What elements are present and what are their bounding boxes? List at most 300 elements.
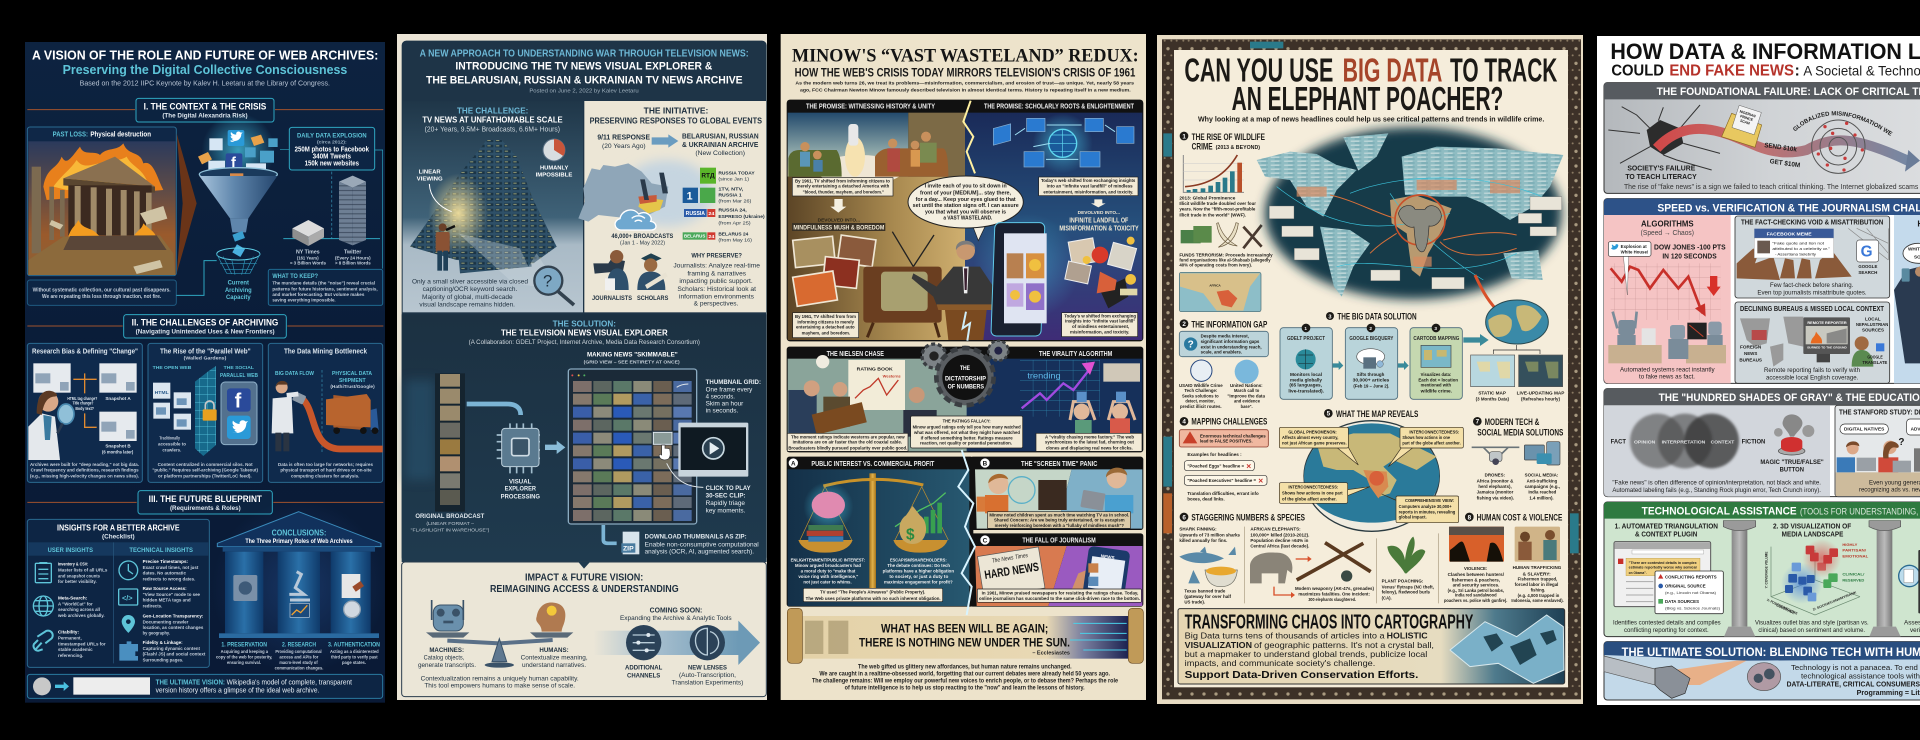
panel: declining bureaus: REMOTE REPORTER (1807, 320, 1847, 325)
caption: virality: A "virality chasing meme factory." The web (1045, 434, 1134, 439)
panel: insights checklist: searching across all (58, 607, 100, 612)
panel: technological assistance: & CONTEXT PLUGIN (1635, 532, 1697, 539)
panel: the initiative: impacting public support. (679, 278, 753, 285)
panel: research bias: Archives were built for "deep reading," not big data. (30, 462, 140, 468)
callout: conflicting reports popup: (Blog vs. Science Journals) (1665, 605, 1721, 610)
caption: web shift: into an "infinite vast landfill" of mindless (1047, 184, 1133, 189)
panel: the initiative: framing & narratives (687, 270, 746, 277)
panel: human cost and violence: HUMAN COST & VIOLENCE (1477, 513, 1562, 523)
icon: lightning divider (963, 101, 975, 173)
panel: Stanford study: ? (1898, 437, 1904, 448)
panel: mapping challenges: ✕ (1258, 478, 1264, 485)
arrow: chip to grid (545, 441, 565, 454)
panel: public interest vs commercial profit: TV used "The People's Airwaves" (Public Property). (820, 590, 925, 595)
callout: ratings fallacy: reaction, not quality or potential penetration. (920, 441, 1012, 446)
banner: transforming chaos into cartography: but a mapmaker to understand global trends, publicize local (1185, 649, 1427, 659)
banner: transforming chaos into cartography: TRANSFORMING CHAOS INTO CARTOGRAPHY (1185, 610, 1473, 633)
caption: web shift: entertainment, misinformation, and toxicity. (1043, 189, 1133, 194)
panel: modern tech and social media: Jamaica (monitor (1477, 489, 1514, 494)
callout: Minow speech: you that what you will observe is (925, 209, 1006, 215)
panel: research bias: Crawl frequency and definitions, research findings (31, 468, 139, 474)
panel: what the map reveals: part of the globe affect another. (1402, 441, 1461, 446)
panel: algorithms: Automated systems react instantly (1620, 367, 1715, 374)
panel: declining bureaus: NEWS (1744, 351, 1757, 356)
panel: the initiative: (since Jan 1) (718, 177, 749, 183)
arrow: loss to archiving basket (176, 261, 217, 295)
panel: past loss burning temple: Physical destruction (90, 132, 151, 139)
panel: research bias: Title change? (73, 401, 94, 406)
panel: the solution: VISUAL (509, 479, 532, 485)
chart: market crash (1611, 263, 1721, 320)
caption: web shift: Today's web shifted from exchanging insights (1041, 178, 1136, 183)
caption: Nielsen chase: Broadcasters blindly pursued popularity over public good. (788, 445, 907, 450)
panel: staggering numbers: PLANT POACHING: (1382, 578, 1424, 584)
panel: parallel web: crawlers. (162, 447, 181, 452)
panel: the solution: (GRID VIEW – SEE ENTIRETY AT ONCE) (584, 360, 680, 366)
panel: technological assistance (1604, 502, 1920, 637)
panel: insights checklist: Documenting crawler (143, 619, 189, 624)
panel: public interest vs commercial profit: A (791, 460, 796, 467)
panel: screen time panic: Minow noted children spent as much time watching TV as in school. (989, 512, 1129, 517)
panel: information gap: 2 (1182, 321, 1186, 328)
panel: Minow vast wasteland infographic (781, 34, 1146, 700)
chart: rise of wildlife crime (1180, 132, 1265, 192)
callout: ultimate vision: THE ULTIMATE VISION: (156, 679, 225, 686)
panel: impact and future vision: IMPACT & FUTURE VISION: (525, 573, 643, 584)
panel: research bias: Body text? (75, 406, 94, 411)
panel: staggering numbers: Population decline ≈64% in (1250, 538, 1309, 543)
caption: past loss (27, 280, 176, 305)
labels: NY Times and Twitter words: (161 Years) (297, 255, 319, 260)
text block: funds terrorism: Proceeds increasingly (1225, 252, 1273, 257)
panel: impact and future vision: This tool empowers humans to make sense of scale. (424, 683, 575, 690)
caption: Nielsen chase: The moment ratings indicate westerns are popular, new (791, 434, 905, 439)
icon: bucket challenge people (1070, 363, 1140, 437)
panel: technological assistance: Identifies contested details and compiles (1613, 619, 1721, 626)
panel: the challenge: Only a small sliver accessible via closed (412, 279, 528, 286)
panel: staggering numbers: (CA). (1382, 595, 1392, 600)
panel: data and information literacy infographic (1597, 36, 1920, 705)
panel: the solution: in seconds. (706, 409, 739, 415)
text block: what to keep: The mundane details (the "noise") reveal crucial (272, 280, 375, 285)
chart: 3D media landscape: PARTISAN/ (1842, 548, 1867, 553)
banner: transforming chaos into cartography: Big Data turns tens of thousands of articles into a (1185, 631, 1385, 641)
panel: public interest vs commercial profit: platforms have a higher obligation (883, 569, 954, 574)
heading: mindfulness mush: DEVOLVED INTO... (818, 217, 861, 223)
panel: hundred shades of gray: BUTTON (1780, 467, 1804, 474)
panel: the challenge: VIEWING (417, 177, 443, 183)
panel: big data solution (1280, 311, 1462, 399)
panel: modern tech and social media: 1.4 million). (1529, 495, 1554, 500)
panel: research bias (27, 343, 142, 482)
callout: ratings fallacy: what was offered, not what they might have watched (913, 430, 1020, 435)
panel: research bias: Snapshot A (105, 396, 131, 401)
icon: newsroom men and ratings book (788, 355, 937, 437)
panel: information gap: base". (1241, 404, 1253, 409)
panel: the initiative (578, 101, 766, 312)
caption: TV shift (792, 178, 893, 196)
icon: newspaper hard news: The News Times (991, 553, 1029, 565)
panel: staggering numbers: Upwards of 73 million sharks (1179, 532, 1240, 537)
icon: hands holding Facebook meme: attributed to a celebrity or." (1772, 246, 1831, 251)
panel: the solution: CLICK TO PLAY (706, 486, 751, 492)
panel: parallel web (148, 343, 263, 482)
panel: data mining bottleneck: (HathiTrust/Google) (330, 384, 375, 390)
heading: section I (136, 98, 274, 122)
panel: insights checklist: Permanent, (58, 635, 82, 640)
panel: the challenge: TV NEWS AT UNFATHOMABLE SCALE (422, 115, 563, 125)
heading: mindfulness mush: MINDFULNESS MUSH & BOREDOM (793, 224, 885, 231)
text block: closing: We are caught in a realtime-obsessed world, forgetting that our current debates were already held 50 years ago. (819, 672, 1110, 678)
panel: modern tech and social media: herd elephants), (1478, 484, 1512, 489)
callout: ultimate vision: version history offers a glimpse of the ideal web archive. (156, 687, 319, 694)
panel: insights checklist: </> (122, 594, 133, 603)
icon: misinformation web: GLOBALIZED MISINFORMATION WEB (1793, 111, 1892, 136)
panel: information gap: Despite media interest, (1201, 333, 1249, 338)
heading: infinite landfill: DEVOLVED INTO... (1078, 210, 1121, 216)
panel: staggering numbers: 300 elephants slaughtered. (1308, 597, 1356, 602)
panel: staggering numbers: (gateway for over half (1184, 594, 1232, 599)
panel: screen time panic: Shared Concern: Are we being truly entertained, or is escapism (994, 518, 1125, 523)
panel: impact and future vision: ADDITIONAL (625, 664, 662, 671)
panel: insights checklist: by geography. (143, 631, 170, 636)
panel: hundred shades of gray: FICTION (1742, 438, 1766, 445)
labels: NY Times and Twitter words: > 8 Billion Words (335, 261, 371, 266)
icon: scam envelope: SCAM (1740, 119, 1750, 126)
banner: scroll quote: THERE IS NOTHING NEW UNDER THE SUN. (859, 636, 1070, 650)
panel: big data solution: mentioned with (1421, 383, 1451, 388)
intro text (795, 80, 1134, 93)
panel: the initiative: RUSSIA TODAY (718, 170, 755, 176)
panel: the promise comparison: THE PROMISE: WITNESSING HISTORY & UNITY (806, 102, 935, 111)
panel: human column cropped at edge (1894, 215, 1920, 383)
icon: video player popup (653, 423, 748, 477)
panel: past loss burning temple (27, 127, 176, 276)
banner: scroll quote: – Ecclesiastes (1032, 651, 1070, 657)
caption: web devolved: insights into "infinite vast landfill" (1065, 319, 1135, 324)
panel: data mining bottleneck: SHIPMENT (339, 378, 366, 384)
panel: algorithms: ALGORITHMS (1641, 218, 1694, 228)
title: elephant poacher (1184, 53, 1557, 118)
icon: newsroom men and ratings book: Westerns (883, 373, 901, 378)
panel: screen time panic (970, 457, 1143, 530)
panel: human cost and violence: (e.g. 4,000 trapped in (1518, 593, 1560, 598)
panel: foundational failure (1604, 82, 1920, 194)
callout: conflicting reports popup: (e.g., Lincoln not Obama) (1665, 590, 1717, 595)
panel: big data solution: Visualizes data: (1421, 372, 1452, 377)
icon: dictatorship of numbers gear: DICTATORSHIP (945, 376, 986, 383)
panel: algorithms: DOW JONES -100 PTS (1654, 243, 1726, 252)
panel: the initiative: Journalists: Analyze real-time (673, 263, 760, 270)
panel: the solution: Enable non-consumptive computational (645, 541, 759, 548)
panel: what the map reveals: global impact. (1399, 515, 1427, 520)
text block: global prominence (1179, 195, 1256, 217)
icon: magic button (1774, 414, 1814, 455)
panel: information gap: ? (1188, 340, 1194, 351)
panel: big data solution: 1 (1304, 326, 1307, 331)
panel: fact checking void (1735, 216, 1890, 298)
arrow: coming soon (593, 621, 760, 665)
chart: thumbnail grid (573, 381, 692, 521)
panel: screen time panic: B (983, 460, 988, 467)
icon: Minow at podium (912, 241, 1025, 341)
panel: impact and future vision: Contextualization remains a uniquely human capability. (421, 675, 579, 682)
heading: section III (138, 491, 272, 514)
panel: big data solution: 2 (1369, 326, 1372, 331)
text block: funds terrorism: FUNDS TERRORISM: (1179, 252, 1224, 257)
callout: daily data explosion: 150k new websites (305, 161, 359, 168)
text block: what to keep: and market forecasting. But volume makes (272, 292, 365, 297)
panel: the initiative: JOURNALISTS (592, 296, 632, 302)
panel: big data solution: (Feb 19 – June 2). (1353, 383, 1389, 388)
panel: the initiative: 1 (687, 190, 693, 202)
panel: foundational failure: The rise of "fake news" is a sign we failed to teach critical thinking. The Internet globalized scams (1624, 184, 1919, 191)
panel: human cost and violence: VIOLENCE: (1464, 566, 1488, 572)
chart: NY Times versus Twitter data stacks (283, 176, 380, 246)
title: elephant poacher: AN ELEPHANT POACHER? (1232, 81, 1503, 118)
panel: Stanford study (1835, 405, 1920, 497)
panel: big data solution: 30,000+ articles (1353, 377, 1390, 382)
panel: data mining bottleneck (268, 343, 383, 482)
panel: the challenge: LINEAR (419, 169, 441, 175)
chart: 3D media landscape (1764, 539, 1869, 616)
panel: data mining bottleneck: PHYSICAL DATA (332, 371, 372, 377)
callout: ratings fallacy: if offered something better. Ratings measure (921, 435, 1013, 440)
text block: three roles: 1. PRESERVATION (221, 642, 267, 648)
panel: big data solution: (65 languages, (1289, 383, 1322, 388)
panel: the solution: One frame every (706, 387, 752, 393)
panel: what the map reveals: INTERCONNECTEDNESS: (1409, 429, 1460, 434)
title: web archives: Preserving the Digital Collective Consciousness (63, 63, 347, 77)
icon: robot and human handshake (1604, 656, 1747, 698)
arrow: film to processor (467, 404, 521, 415)
panel: staggering numbers: STAGGERING NUMBERS & SPECIES (1191, 513, 1305, 523)
panel: big data solution: Monitors local (1290, 372, 1322, 377)
panel: big data solution: 3 (1434, 326, 1437, 331)
panel: the initiative: & UKRAINIAN ARCHIVE (682, 140, 758, 149)
panel: what the map reveals: not just African game preserves. (1282, 441, 1347, 446)
heading: section I: (The Digital Alexandria Risk) (162, 112, 248, 119)
panel: what the map reveals: of the globe affect another. (1282, 496, 1337, 501)
caption: TV shift: "blood, thunder, mayhem, and boredom." (803, 190, 884, 195)
panel: human cost and violence: forced labor in illegal (1515, 582, 1558, 587)
panel: impact and future vision: (Auto-Transcription, (679, 672, 736, 679)
callout: ultimate vision (27, 674, 383, 698)
labels: NY Times and Twitter words: ≈ 3 Billion Words (290, 261, 326, 266)
panel: impact and future vision: MACHINES: (429, 647, 464, 654)
panel: modern tech and social media (1472, 417, 1563, 500)
panel: insights checklist: hidden META tags and (143, 598, 191, 603)
panel: big data solution: GDELT PROJECT (1287, 336, 1326, 342)
icon: greek column (1723, 521, 1756, 637)
panel: insights checklist: INSIGHTS FOR A BETTER ARCHIVE (57, 522, 180, 532)
panel: foundational failure: GET $10M (1769, 158, 1801, 169)
panel: the initiative: information environments (679, 294, 754, 301)
panel: insights checklist: Geo-Location Transparency: (143, 613, 204, 618)
label: current archiving capacity: Archiving (225, 287, 252, 294)
banner: transforming chaos into cartography: Support Data-Driven Conservation Efforts. (1185, 670, 1418, 681)
panel: human cost and violence: 8 (1468, 514, 1472, 521)
heading: infinite landfill (1059, 210, 1139, 232)
panel: the initiative: WHY PRESERVE? (691, 253, 742, 260)
icon: scales with brain and money: $ (906, 526, 915, 543)
panel: human cost and violence: Clashes between hunters/ (1448, 572, 1505, 577)
panel: the challenge: HUMANLY (540, 165, 569, 171)
panel: parallel web: PARALLEL WEB (220, 373, 258, 379)
panel: declining bureaus: BUREAUS (1739, 357, 1762, 362)
panel: insights checklist: web archives globally. (57, 613, 105, 618)
panel: the solution: THE SOLUTION: (553, 318, 616, 328)
panel: impact and future vision: NEW LENSES (688, 664, 727, 671)
panel: staggering numbers: felony), Redwood burls (1382, 590, 1430, 595)
text block: closing: of future intelligence is to help us stop reacting to the "now" and learn the lessons of history. (845, 685, 1085, 691)
panel: hundred shades of gray: OPINION (1634, 439, 1656, 445)
icon: Google search: G (1861, 244, 1873, 261)
panel: the solution: 30-SEC CLIP: (706, 494, 746, 500)
callout: daily data explosion (289, 127, 375, 170)
callout: Minow speech: a VAST WASTELAND. (943, 215, 993, 221)
text block: three roles: Acquiring and keeping a (221, 649, 268, 654)
chart: rise of wildlife crime: THE RISE OF WILDLIFE (1192, 132, 1265, 142)
panel: parallel web: Content centralized in commercial silos. Not (158, 462, 253, 468)
icon: misinformation web (1793, 111, 1892, 174)
icon: dictatorship of numbers gear: OF NUMBERS (948, 384, 984, 391)
panel: staggering numbers (1179, 513, 1438, 604)
arrow: misinformation swoosh (1657, 129, 1920, 172)
panel: insights checklist (27, 519, 209, 667)
icon: newsroom men and ratings book: RATING BOOK (857, 367, 893, 372)
callout: conflicting reports popup (1655, 571, 1723, 614)
panel: the initiative: (New Collection) (695, 150, 745, 157)
panel: human cost and violence: fishermen & poachers, (1452, 577, 1500, 582)
panel: the initiative: 1TV, NTV, (718, 187, 744, 193)
callout: ratings fallacy: Minow argued ratings only tell you how many watched (913, 425, 1021, 430)
icon: static and live maps: STATIC MAP (1478, 390, 1507, 396)
panel: insights checklist: redirects to wrong dates. (143, 577, 195, 582)
panel: ultimate solution: technological assistance tools with (1801, 671, 1920, 680)
intro text: As the modern web turns 26, we treat its problems—misinformation, commercialism, and erosion of trust—as unique. Yet, nearly 58 years (795, 80, 1134, 86)
icon: document lens (1899, 550, 1920, 613)
panel: insights checklist: Capturing dynamic content (143, 646, 200, 651)
panel: the challenge: ? (543, 272, 552, 291)
panel: public interest vs commercial profit: not just cater to whims. (803, 580, 852, 585)
panel: fall of journalism: THE FALL OF JOURNALISM (1022, 536, 1096, 545)
panel: big data solution: media globally (1290, 377, 1322, 382)
panel: data mining bottleneck: physical transport of hard drives or on-site (280, 468, 372, 474)
caption: TV devolved: By 1961, TV shifted from from (795, 314, 856, 319)
callout: conflicting reports popup: ORIGINAL SOURCE (1665, 584, 1706, 589)
panel: fall of journalism: In 1961, Minow praised newspapers for resisting the ratings chase. Today, (982, 590, 1138, 595)
panel: information gap: exist in understanding reach, (1201, 344, 1262, 349)
panel: the solution: EXPLORER (505, 487, 537, 493)
heading: mindfulness mush (792, 217, 885, 231)
icon: static and live maps: (Refreshes hourly) (1521, 397, 1561, 402)
panel: insights checklist: Citability: (58, 630, 79, 635)
heading: section II: II. THE CHALLENGES OF ARCHIVING (132, 318, 278, 328)
panel: fact checking void: THE FACT-CHECKING VOID & MISATTRIBUTION (1741, 220, 1883, 227)
callout: daily data explosion: DAILY DATA EXPLOSION (297, 132, 367, 139)
panel: data mining bottleneck: computing clusters for analysis. (291, 474, 360, 480)
panel: modern tech and social media: campaigns (e.g., (1525, 484, 1560, 489)
panel: speed vs verification (1604, 199, 1920, 383)
panel: the challenge: (20+ Years, 9.5M+ Broadcasts, 6.6M+ Hours) (425, 127, 560, 134)
callout: tweet bubble: White House! (1621, 249, 1649, 254)
panel: information gap: March call to (1234, 388, 1260, 393)
icon: central lightning bolt (958, 450, 975, 615)
panel: mapping challenges: "Poached Executives" headline = (1187, 478, 1256, 483)
panel: human cost and violence: & SLAVERY: (1523, 572, 1551, 578)
callout: daily data explosion: (circa 2012): (317, 139, 347, 144)
banner: scroll quote (787, 608, 1143, 663)
panel: big data solution: wildlife crime. (1420, 389, 1452, 394)
panel: information gap: significant information gaps (1201, 339, 1260, 344)
caption: virality: synchronizes to the latest fad, churning out (1045, 440, 1134, 445)
title: data literacy: : (1795, 62, 1800, 79)
panel: modern tech and social media: fishing via video). (1477, 495, 1514, 500)
panel: staggering numbers: US trade). (1184, 599, 1205, 604)
panel: conclusions temple: CONCLUSIONS: (272, 528, 326, 538)
panel: the solution: ORIGINAL BROADCAST (415, 513, 484, 520)
panel: impact and future vision: understand narratives. (522, 662, 586, 669)
panel: what the map reveals: WHAT THE MAP REVEALS (1336, 409, 1418, 419)
icon: balance with robot and human (426, 600, 573, 668)
label: current archiving capacity (225, 280, 252, 301)
chart: 3D media landscape: X: POSITIVE/NEGATIVE (1766, 598, 1799, 616)
panel: impact and future vision: Expanding the Archive & Analytic Tools (620, 615, 732, 622)
panel: what the map reveals: Affects almost every country, (1282, 435, 1338, 440)
panel: insights checklist: Inventory & CSV: (58, 562, 89, 567)
panel: mapping challenges: Translation difficulties, errant info (1187, 491, 1259, 496)
chart: 3D media landscape: COVERAGE (1776, 603, 1796, 616)
panel: big data solution: CARTODB MAPPING (1413, 336, 1459, 342)
panel: mapping challenges: 4 (1182, 419, 1186, 426)
title: TV news visual explorer: INTRODUCING THE TV NEWS VISUAL EXPLORER & (455, 61, 712, 73)
panel: public interest vs commercial profit: ESCAPISM/SHAREHOLDERS: (890, 557, 947, 562)
panel: technological assistance: conflicting reporting for context. (1624, 627, 1709, 634)
panel: the solution: Skim an hour (706, 402, 743, 408)
panel: what the map reveals: Shows how actions in one part (1282, 491, 1343, 496)
panel: what the map reveals: INTERCONNECTEDNESS: (1288, 485, 1339, 490)
panel: insights checklist: redirects. (143, 603, 162, 608)
panel: research bias: (6 months later) (102, 449, 134, 454)
panel: mapping challenges: Enormous technical challenges (1200, 433, 1266, 438)
panel: research bias: HTML tag change? (67, 396, 98, 401)
icon: Google search: SEARCH (1858, 270, 1878, 275)
icon: TV photos and set (793, 232, 942, 337)
labels: NY Times and Twitter words: (Every 24 Hours) (335, 255, 371, 260)
panel: fall of journalism: C (983, 537, 988, 544)
panel: human cost and violence: India red sandalwood (1455, 593, 1497, 598)
panel: insights checklist: Precise Timestamps: (143, 559, 188, 564)
panel: the challenge: Majority of global, multi-decade (422, 294, 513, 301)
panel: ultimate solution (1604, 642, 1920, 700)
panel: insights checklist: Exact crawl times, not just (143, 565, 199, 570)
chart: 3D media landscape: Z: SOCIOECONOMY/RANK (1812, 590, 1858, 612)
panel: the initiative: 46,000+ BROADCASTS (611, 234, 673, 240)
panel: insights checklist: USER INSIGHTS (48, 547, 93, 554)
panel: information gap (1179, 319, 1268, 409)
title: vast wasteland: MINOW'S “VAST WASTELAND” REDUX: (792, 45, 1139, 66)
panel: insights checklist: Raw Source Access: (143, 586, 187, 591)
panel: research bias: Research Bias & Defining "Change" (32, 348, 138, 355)
title: TV news visual explorer: THE BELARUSIAN, RUSSIAN & UKRAINIAN TV NEWS ARCHIVE (426, 74, 743, 86)
chart: 3D media landscape: HIGHLY (1842, 542, 1858, 547)
arrow: chevron divider (177, 133, 197, 273)
labels: NY Times and Twitter words: NY Times (296, 249, 320, 255)
text block: funds terrorism: 40% of operating costs from ivory). (1179, 263, 1252, 268)
labels: NY Times and Twitter words (290, 249, 371, 266)
icon: spider web (1848, 228, 1888, 260)
